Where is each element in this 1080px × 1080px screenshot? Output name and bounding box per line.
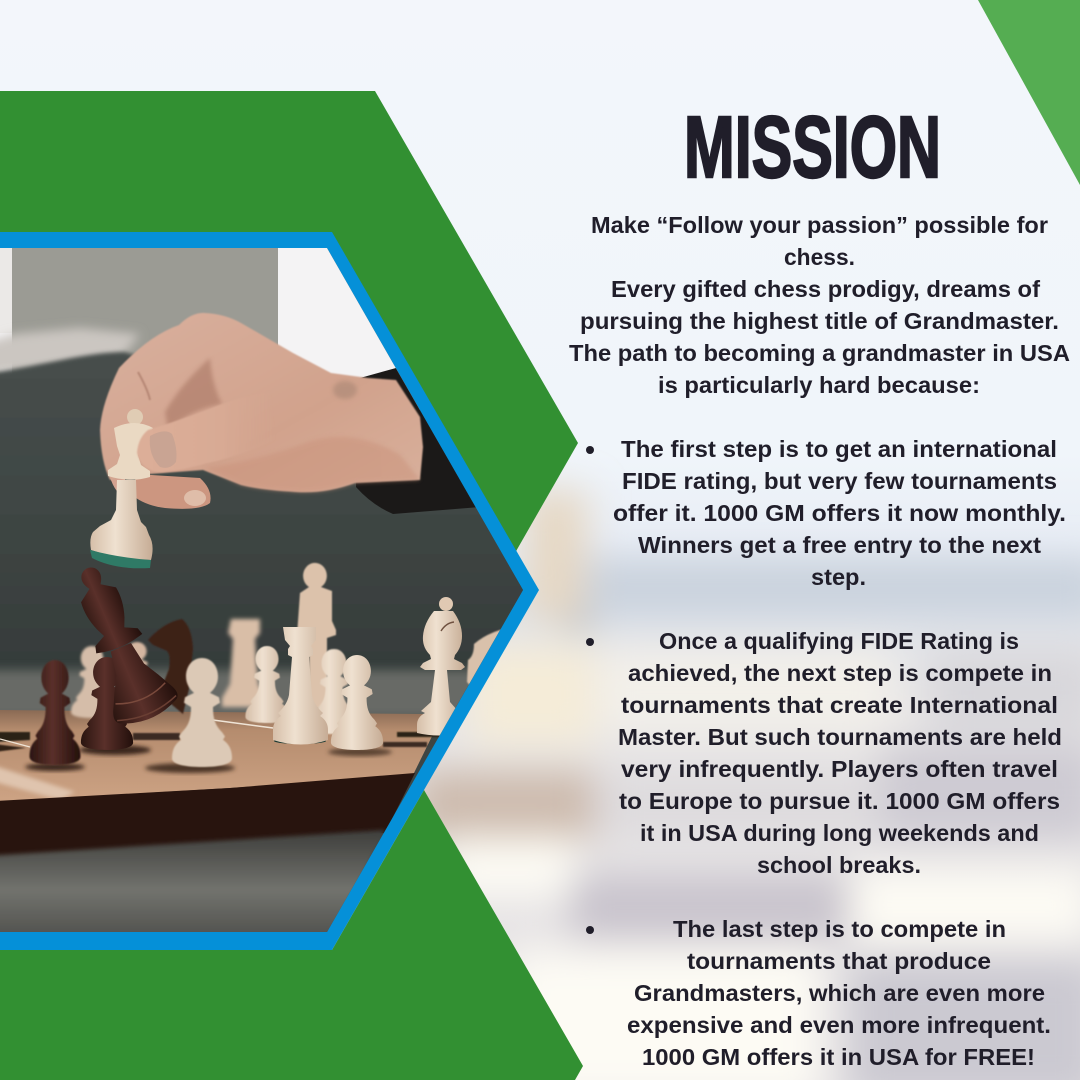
bullet 1: FIDE rating: step. bbox=[811, 564, 866, 590]
bullet 2: International Master: very infrequently. Players often travel bbox=[621, 756, 1058, 782]
thumb bbox=[136, 405, 222, 472]
pale pawn left of king bbox=[70, 644, 105, 720]
lower palm warm shading bbox=[205, 437, 420, 492]
chess board top bbox=[0, 710, 440, 802]
finger behind the piece bbox=[110, 478, 125, 491]
white piece at right edge bbox=[466, 628, 501, 685]
bullet 2: International Master: Master. But such tournaments are held bbox=[618, 724, 1062, 750]
white king background bbox=[297, 563, 336, 708]
bullet 3: Grandmasters: The last step is to compete in bbox=[673, 916, 1006, 942]
white bishop bbox=[417, 597, 465, 736]
bullet 2: International Master: tournaments that create International bbox=[621, 692, 1058, 718]
photo: hand moving a chess piece over a board bbox=[0, 248, 560, 950]
thumbnail bbox=[150, 431, 176, 468]
knuckle crease bbox=[138, 372, 150, 400]
queen piece bbox=[90, 409, 153, 568]
arm sleeve bbox=[356, 368, 480, 514]
table surface bbox=[0, 670, 560, 718]
board front edge bbox=[0, 773, 415, 860]
bullet 3: Grandmasters: 1000 GM offers it in USA for FREE! bbox=[642, 1044, 1035, 1070]
pale pawn behind black king bbox=[128, 640, 150, 666]
top green hexagon band bbox=[0, 91, 578, 553]
blue hexagon frame bbox=[0, 232, 539, 950]
intro text: Every gifted chess prodigy, dreams of bbox=[611, 276, 1040, 302]
black pawn center bbox=[81, 657, 133, 750]
table foreground bbox=[0, 828, 385, 932]
intro text: Make “Follow your passion” possible for bbox=[591, 212, 1048, 238]
board squares and reflections bbox=[0, 720, 440, 800]
intro text: The path to becoming a grandmaster in USA bbox=[569, 340, 1070, 366]
white pawn middle bbox=[245, 646, 289, 723]
intro text: pursuing the highest title of Grandmaster. bbox=[580, 308, 1059, 334]
black knight bbox=[148, 619, 193, 714]
intro text bbox=[569, 212, 1070, 398]
bullet 2: International Master bbox=[586, 628, 1062, 878]
hand bbox=[100, 313, 423, 492]
bullet 1: FIDE rating: FIDE rating, but very few tournaments bbox=[622, 468, 1057, 494]
title: MISSION bbox=[684, 99, 941, 196]
finger crease bbox=[165, 358, 222, 430]
bottom green hexagon band bbox=[0, 790, 583, 1080]
wall behind the player bbox=[0, 248, 420, 428]
bullet 3: Grandmasters: Grandmasters, which are even more bbox=[634, 980, 1045, 1006]
bullet 3: Grandmasters: tournaments that produce bbox=[687, 948, 991, 974]
bullet 2: International Master: school breaks. bbox=[757, 852, 921, 878]
black king tilted bbox=[81, 568, 178, 724]
fingers below the piece bbox=[135, 474, 211, 509]
bullet 3: Grandmasters: expensive and even more infrequent. bbox=[627, 1012, 1051, 1038]
lower fingernail bbox=[184, 490, 206, 506]
white pawn foreground bbox=[172, 658, 232, 767]
white rook bbox=[273, 627, 328, 744]
bullet 2: International Master: to Europe to pursue it. 1000 GM offers bbox=[619, 788, 1060, 814]
bullet 2: International Master: achieved, the next step is compete in bbox=[628, 660, 1052, 686]
dark sofa bbox=[0, 352, 560, 710]
bullet 1: FIDE rating bbox=[586, 436, 1066, 590]
white rook background bbox=[222, 619, 266, 707]
black pawn left bbox=[30, 660, 80, 765]
bullet 2: International Master: Once a qualifying FIDE Rating is bbox=[659, 628, 1019, 654]
white pawn behind rook bbox=[318, 648, 348, 735]
blurred chessboard background bbox=[404, 470, 1080, 1080]
bullet 1: FIDE rating: Winners get a free entry to the next bbox=[638, 532, 1041, 558]
white pawn front bbox=[331, 655, 383, 750]
bullet 3: Grandmasters bbox=[586, 916, 1051, 1070]
intro text: chess. bbox=[784, 244, 855, 270]
bullet 2: International Master: it in USA during long weekends and bbox=[640, 820, 1039, 846]
bullet 1: FIDE rating: The first step is to get an international bbox=[621, 436, 1057, 462]
top right green triangle bbox=[978, 0, 1080, 185]
bullet 1: FIDE rating: offer it. 1000 GM offers it now monthly. bbox=[613, 500, 1066, 526]
intro text: is particularly hard because: bbox=[658, 372, 980, 398]
wrist wrinkles bbox=[333, 381, 357, 399]
